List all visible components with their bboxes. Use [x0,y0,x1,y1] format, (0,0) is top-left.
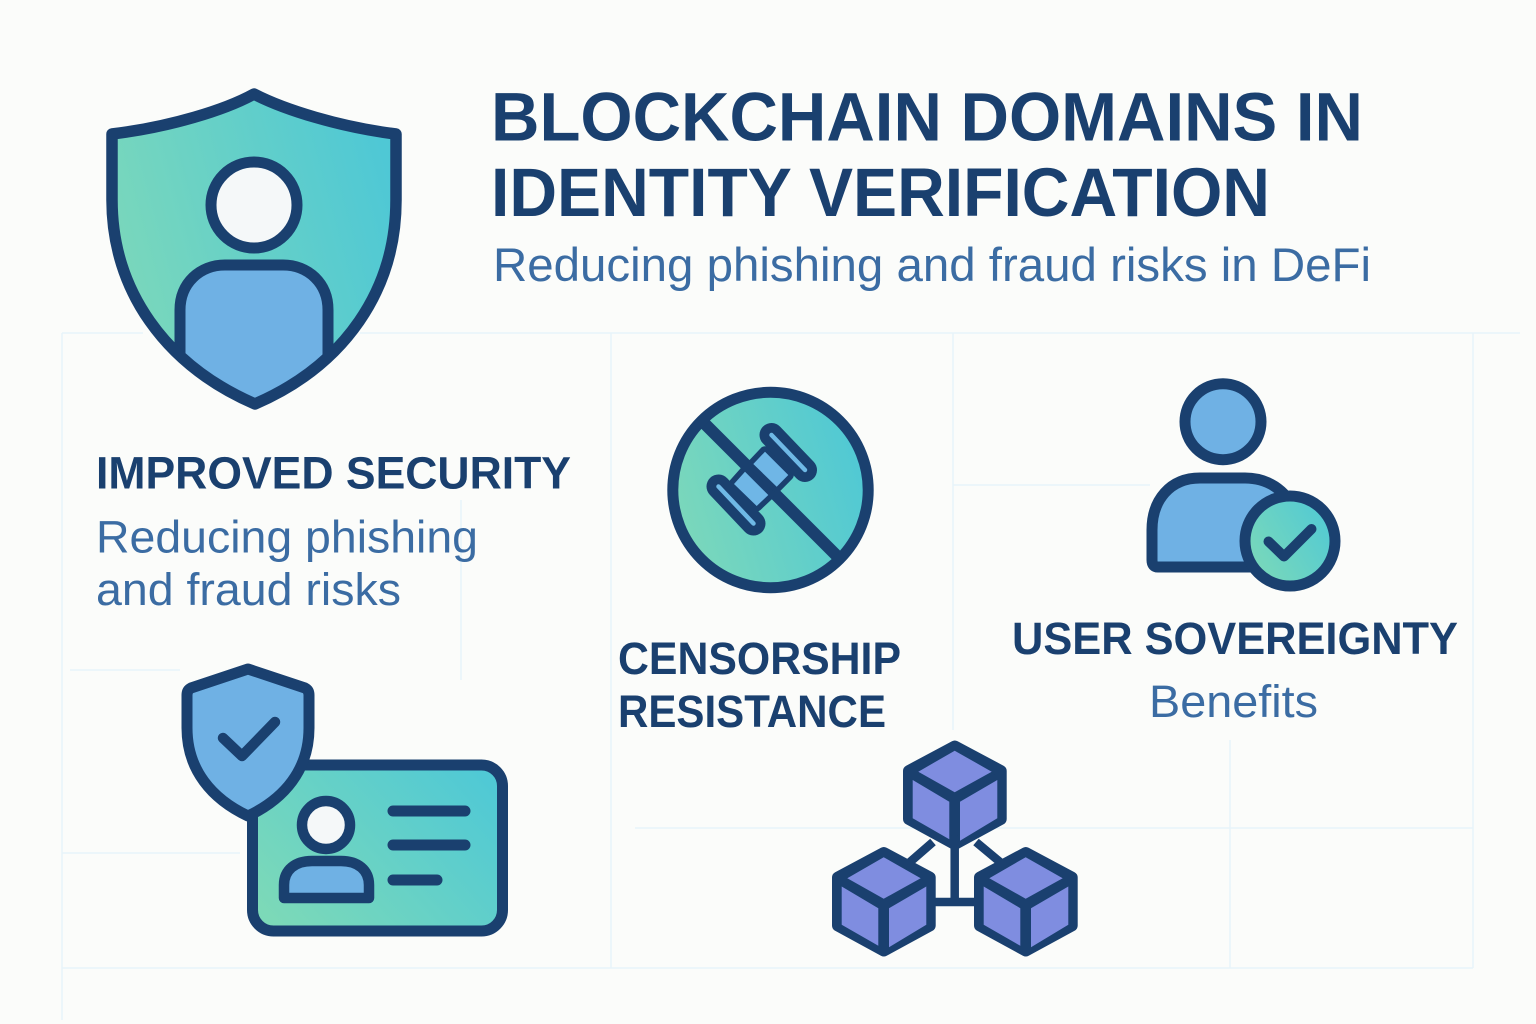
title: IDENTITY VERIFICATION [491,154,1270,231]
icon: crossed-out gavel [673,392,868,588]
heading: censorship resistance [618,633,901,737]
panel: improved security [96,448,571,615]
text: improved security description: Reducing phishing [96,512,478,562]
heading: improved security: IMPROVED SECURITY [96,448,571,498]
title: BLOCKCHAIN DOMAINS IN [491,78,1363,156]
text: improved security description: and fraud risks [96,564,401,615]
icon: verified user [1152,384,1335,586]
panel: censorship resistance [618,392,901,737]
cube: left [838,853,930,950]
heading: censorship resistance: RESISTANCE [618,686,886,737]
cube: right [980,853,1072,950]
heading: censorship resistance: CENSORSHIP [618,633,901,684]
panel: user sovereignty [1012,384,1458,727]
text: improved security description [96,512,478,615]
text: benefits: Benefits [1149,676,1318,727]
icon: blockchain cubes [838,746,1072,950]
heading: user sovereignty: USER SOVEREIGNTY [1012,613,1458,664]
title [491,78,1363,231]
cube: top [909,746,1001,844]
icon: large shield with person [112,94,396,420]
icon: shield and ID card [187,669,502,931]
subtitle: Reducing phishing and fraud risks in DeFi [493,238,1371,291]
